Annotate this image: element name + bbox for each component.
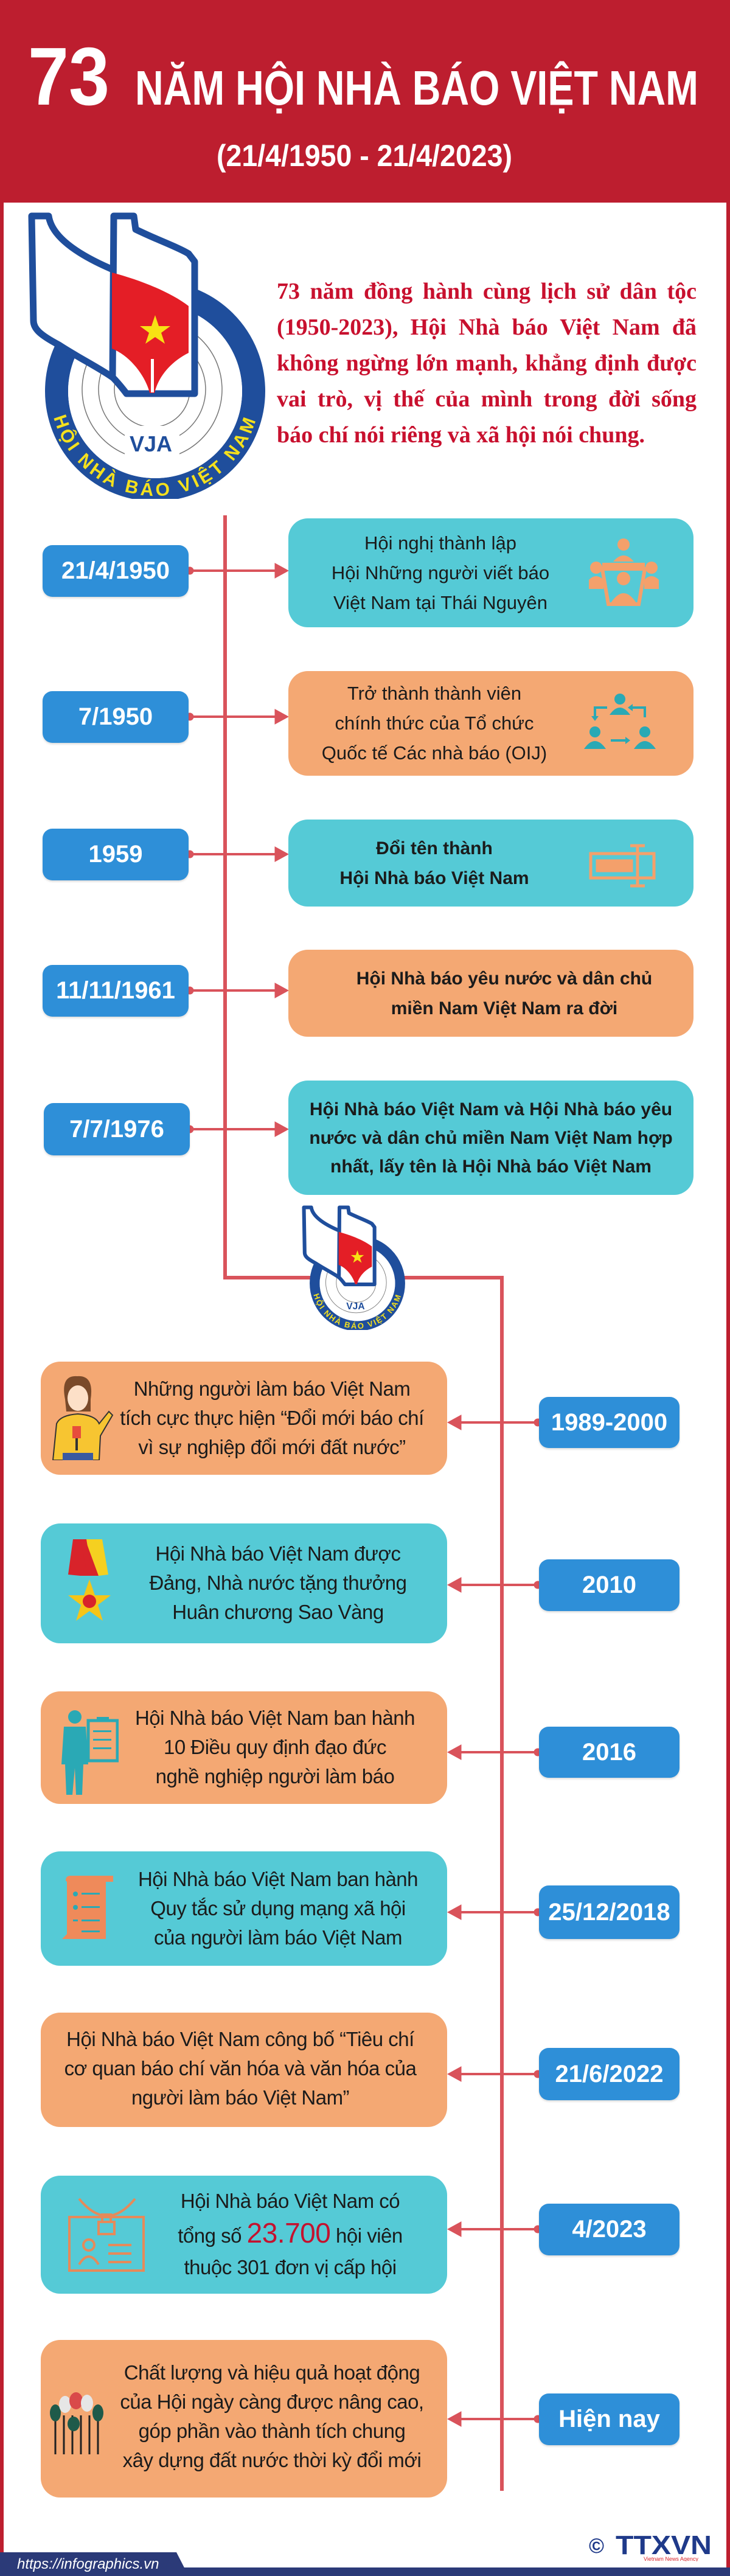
card: culture criteria: người làm báo Việt Nam” [131, 2086, 349, 2109]
date: 21/4/1950 [43, 545, 189, 597]
date: 21/6/2022 [539, 2048, 680, 2100]
card: present: của Hội ngày càng được nâng cao, [120, 2390, 424, 2413]
card: social media rules: Quy tắc sử dụng mạng xã hội [150, 1897, 406, 1920]
card: Gold Star order: Hội Nhà báo Việt Nam được [156, 1542, 400, 1565]
intro paragraph: báo chí nói riêng và xã hội nói chung. [277, 422, 645, 448]
logo: VJA small: HỘI NHÀ BÁO VIỆT NAM [313, 1293, 401, 1329]
card: OIJ membership: Quốc tế Các nhà báo (OIJ) [322, 742, 547, 764]
card: present: góp phần vào thành tích chung [139, 2420, 405, 2442]
card: founding conference: Hội Những người viết báo [332, 562, 549, 583]
card: southern association: Hội Nhà báo yêu nước và dân chủ [356, 969, 652, 989]
card: membership count: thuộc 301 đơn vị cấp hội [184, 2256, 397, 2278]
card: ethics rules: nghề nghiệp người làm báo [156, 1765, 394, 1788]
card: membership count [41, 2176, 447, 2294]
icon: ID badge [68, 2198, 145, 2272]
card: culture criteria: cơ quan báo chí văn hóa và văn hóa của [64, 2057, 416, 2080]
date: 25/12/2018 [539, 1885, 680, 1939]
footer url [0, 2552, 184, 2572]
card: culture criteria: Hội Nhà báo Việt Nam công bố “Tiêu chí [66, 2028, 414, 2050]
date: 7/7/1976: 7/7/1976 [69, 1116, 164, 1143]
card: OIJ membership: Trở thành thành viên [347, 683, 521, 704]
card: rename [288, 820, 693, 907]
date: 2016: 2016 [582, 1739, 636, 1766]
logo: VJA small [302, 1206, 405, 1330]
card: southern association [288, 950, 693, 1037]
card: social media rules [41, 1851, 447, 1966]
card: unification: nhất, lấy tên là Hội Nhà báo Việt Nam [330, 1157, 652, 1177]
footer url: https://infographics.vn [17, 2556, 159, 2572]
card: rename: Hội Nhà báo Việt Nam [339, 868, 529, 888]
icon: scroll list [62, 1876, 113, 1939]
logo: VJA large: VJA [130, 431, 172, 456]
intro paragraph: 73 năm đồng hành cùng lịch sử dân tộc [277, 279, 697, 304]
card: founding conference: Việt Nam tại Thái Nguyên [333, 592, 548, 613]
logo: TTXVN: TTXVN [616, 2531, 712, 2560]
card: present: Chất lượng và hiệu quả hoạt động [124, 2361, 420, 2384]
date: 1989-2000: 1989-2000 [551, 1409, 667, 1436]
date: 2010: 2010 [582, 1572, 636, 1598]
card: press renewal: Những người làm báo Việt Nam [134, 1377, 410, 1400]
intro paragraph: không ngừng lớn mạnh, khẳng định được [277, 350, 697, 376]
intro paragraph: (1950-2023), Hội Nhà báo Việt Nam đã [277, 315, 697, 340]
card: Gold Star order: Đảng, Nhà nước tặng thưởng [149, 1572, 407, 1594]
card: ethics rules [41, 1691, 447, 1804]
card: Gold Star order [41, 1523, 447, 1643]
date: 2016 [539, 1727, 680, 1778]
icon: medal [68, 1539, 111, 1621]
card: southern association: miền Nam Việt Nam ra đời [391, 998, 617, 1018]
card: membership count: Hội Nhà báo Việt Nam có [181, 2190, 400, 2212]
card: present: xây dựng đất nước thời kỳ đổi mới [123, 2449, 421, 2471]
card: press renewal: vì sự nghiệp đổi mới đất nước” [138, 1436, 406, 1458]
footer bar [0, 2567, 730, 2576]
intro paragraph [277, 279, 697, 448]
card: social media rules: của người làm báo Việt Nam [154, 1926, 402, 1949]
date: 4/2023: 4/2023 [572, 2216, 647, 2243]
icon: people exchange [584, 694, 656, 749]
card: ethics rules: 10 Điều quy định đạo đức [164, 1736, 386, 1758]
date: 11/11/1961 [43, 965, 189, 1017]
date: 7/1950: 7/1950 [78, 703, 153, 730]
card: Gold Star order: Huân chương Sao Vàng [172, 1601, 384, 1623]
card: unification [288, 1081, 693, 1195]
card: press renewal: tích cực thực hiện “Đổi mới báo chí [120, 1407, 424, 1429]
card: social media rules: Hội Nhà báo Việt Nam ban hành [138, 1868, 418, 1890]
date: 11/11/1961: 11/11/1961 [56, 977, 175, 1004]
card: press renewal [41, 1362, 447, 1475]
card: present [41, 2340, 447, 2498]
card: founding conference [288, 518, 693, 627]
date: 1989-2000 [539, 1397, 680, 1448]
logo: TTXVN [589, 2531, 712, 2561]
logo: VJA large: HỘI NHÀ BÁO VIỆT NAM [54, 414, 255, 496]
date: 21/4/1950: 21/4/1950 [61, 557, 170, 584]
date: 1959 [43, 829, 189, 880]
card: rename: Đổi tên thành [376, 838, 493, 858]
title: 73 [28, 30, 109, 122]
date: 21/6/2022: 21/6/2022 [555, 2060, 663, 2087]
subtitle dates: (21/4/1950 - 21/4/2023) [217, 139, 512, 173]
date: Hiện nay: Hiện nay [558, 2406, 660, 2432]
card: unification: nước và dân chủ miền Nam Việt Nam hợp [309, 1128, 673, 1148]
header banner [0, 0, 730, 203]
date: 4/2023 [539, 2204, 680, 2255]
date: 25/12/2018: 25/12/2018 [548, 1898, 670, 1925]
icon: woman reporter [52, 1376, 113, 1460]
icon: meeting [589, 538, 659, 606]
side borders [0, 203, 4, 2576]
title [28, 30, 698, 122]
intro paragraph: vai trò, vị thế của mình trong đời sống [277, 386, 697, 412]
card: unification: Hội Nhà báo Việt Nam và Hội Nhà báo yêu [310, 1099, 672, 1119]
date: 7/7/1976 [44, 1103, 190, 1155]
icon: rename field [589, 844, 656, 887]
date: 7/1950 [43, 691, 189, 743]
icon: microphones [50, 2392, 103, 2454]
card: OIJ membership: chính thức của Tổ chức [335, 712, 534, 734]
card: founding conference: Hội nghị thành lập [364, 532, 516, 554]
date: Hiện nay [539, 2393, 680, 2445]
date: 1959: 1959 [89, 841, 142, 868]
logo: VJA small: VJA [346, 1301, 365, 1312]
card: membership count: tổng số 23.700 hội viên [178, 2217, 403, 2249]
card: culture criteria [41, 2013, 447, 2127]
card: ethics rules: Hội Nhà báo Việt Nam ban hành [135, 1707, 415, 1729]
icon: man with clipboard [61, 1710, 119, 1795]
card: OIJ membership [288, 671, 693, 776]
logo: TTXVN: © [589, 2535, 604, 2558]
logo: VJA large [28, 213, 265, 499]
date: 2010 [539, 1559, 680, 1611]
